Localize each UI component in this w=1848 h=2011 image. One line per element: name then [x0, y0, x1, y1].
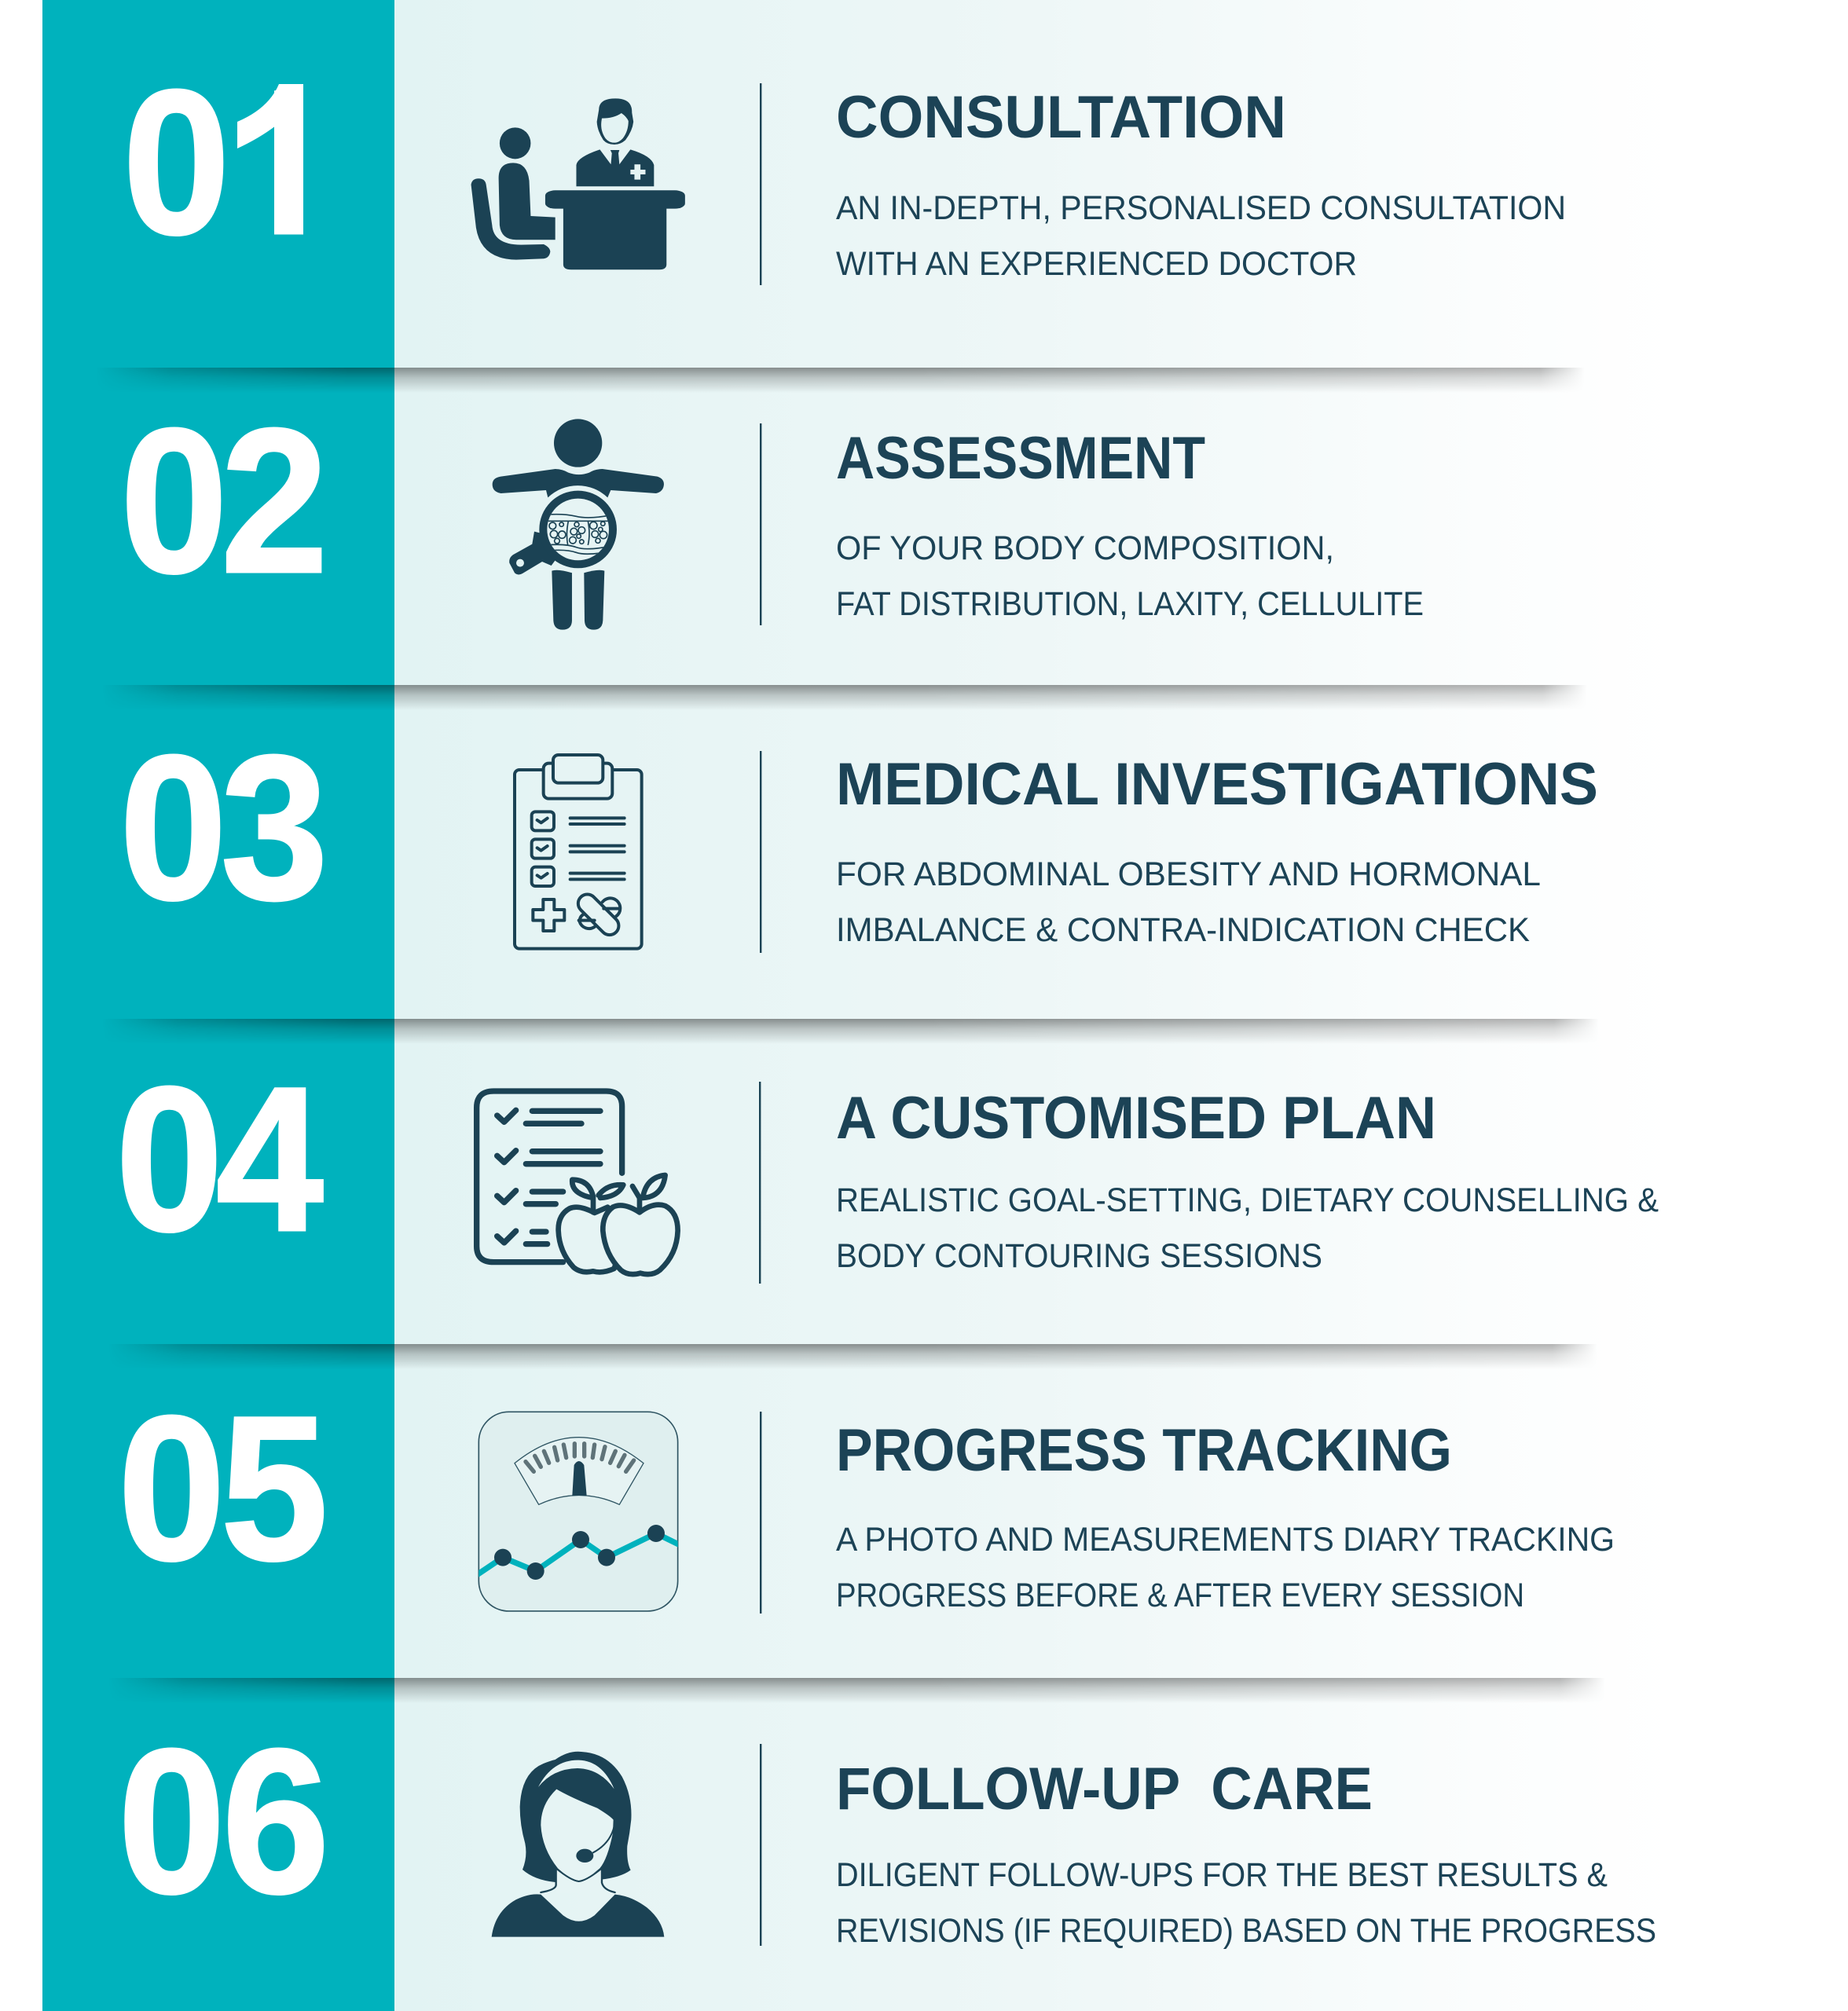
- number 01: 01: [123, 47, 336, 277]
- divider row 2: [760, 423, 761, 625]
- number 01: [129, 84, 303, 236]
- number 06: 06: [118, 1706, 330, 1936]
- icon: weighing scale and progress chart: [477, 1412, 680, 1611]
- icon: support agent with headset: [492, 1752, 664, 1937]
- icon: body assessment with magnifier: [493, 419, 664, 630]
- divider row 1: [760, 83, 761, 285]
- divider row 6: [760, 1744, 761, 1946]
- divider row 4: [759, 1082, 761, 1284]
- description: assessment: OF YOUR BODY COMPOSITION,: [836, 529, 1334, 567]
- description: medical investigations: FOR ABDOMINAL OBESITY AND HORMONAL: [836, 855, 1541, 893]
- description: medical investigations: IMBALANCE & CONTRA-INDICATION CHECK: [836, 911, 1530, 949]
- title: medical investigations: MEDICAL INVESTIGATIONS: [836, 751, 1598, 818]
- icon: clipboard checklist: [515, 755, 642, 949]
- number 03: 03: [119, 712, 328, 943]
- description: progress tracking: PROGRESS BEFORE & AFTER EVERY SESSION: [836, 1577, 1524, 1614]
- title: consultation: CONSULTATION: [836, 84, 1286, 151]
- description: assessment: [836, 529, 1424, 623]
- title: progress tracking: PROGRESS TRACKING: [836, 1417, 1452, 1484]
- title: assessment: ASSESSMENT: [836, 425, 1205, 492]
- icon: doctor consultation: [471, 98, 685, 269]
- number 05: 05: [118, 1373, 328, 1603]
- divider row 5: [760, 1412, 761, 1614]
- description: follow-up care: REVISIONS (IF REQUIRED) BASED ON THE PROGRESS: [836, 1912, 1656, 1950]
- description: consultation: WITH AN EXPERIENCED DOCTOR: [836, 245, 1357, 283]
- description: progress tracking: A PHOTO AND MEASUREMENTS DIARY TRACKING: [836, 1521, 1615, 1559]
- description: medical investigations: [836, 855, 1541, 949]
- panel: content background: [394, 0, 1691, 2011]
- panel: teal number band: [42, 0, 394, 2011]
- row shadows: [96, 368, 1605, 1703]
- title: a customised plan: A CUSTOMISED PLAN: [836, 1085, 1436, 1152]
- description: assessment: FAT DISTRIBUTION, LAXITY, CELLULITE: [836, 585, 1424, 623]
- divider row 3: [760, 751, 761, 953]
- description: consultation: [836, 189, 1566, 283]
- number 04: 04: [116, 1044, 324, 1274]
- number 02: 02: [120, 386, 328, 616]
- description: a customised plan: [836, 1181, 1659, 1275]
- description: consultation: AN IN-DEPTH, PERSONALISED CONSULTATION: [836, 189, 1566, 227]
- icon: diet plan checklist and apples: [477, 1091, 678, 1274]
- title: follow-up care: FOLLOW-UP CARE: [836, 1756, 1373, 1822]
- description: follow-up care: DILIGENT FOLLOW-UPS FOR THE BEST RESULTS &: [836, 1856, 1608, 1894]
- description: follow-up care: [836, 1856, 1656, 1950]
- description: progress tracking: [836, 1521, 1615, 1614]
- description: a customised plan: REALISTIC GOAL-SETTING, DIETARY COUNSELLING &: [836, 1181, 1659, 1219]
- description: a customised plan: BODY CONTOURING SESSIONS: [836, 1237, 1322, 1275]
